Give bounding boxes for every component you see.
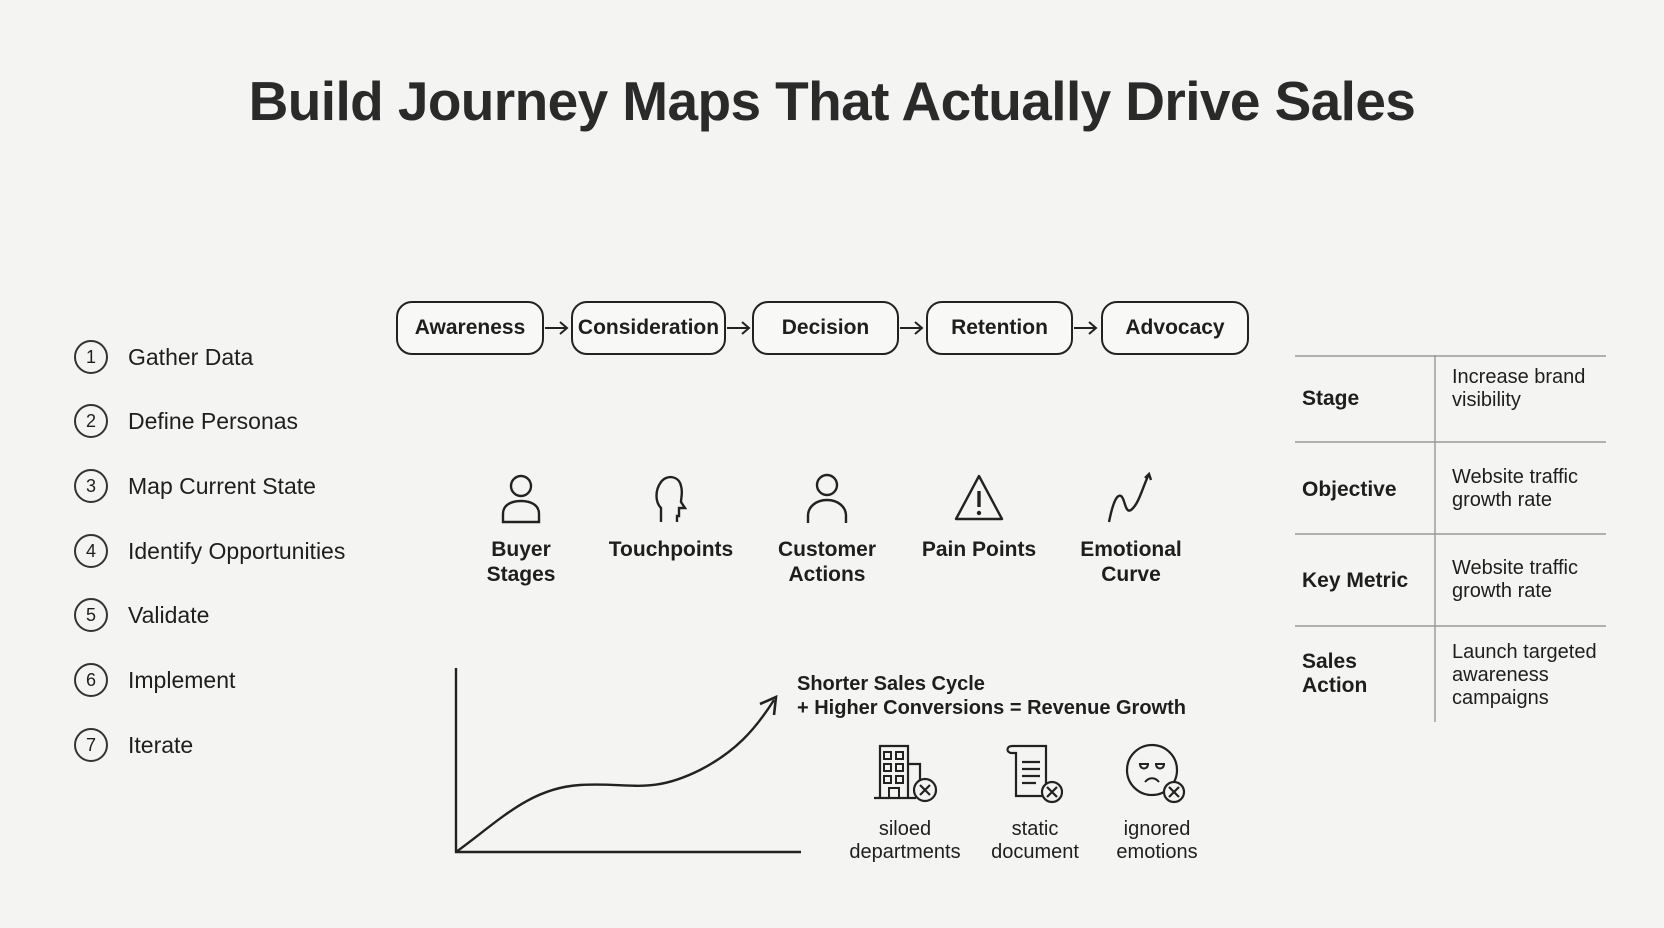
step 4 [74,534,345,568]
icon: buyer stages: Stages [487,563,555,586]
icon: touchpoints: Touchpoints [609,538,733,561]
step 2 [74,404,298,438]
step 3: 3 [86,476,96,496]
step 3: Map Current State [128,472,316,498]
stage: Awareness [396,301,544,355]
icon: emotional curve: Emotional [1080,538,1182,561]
table value: objective [1452,466,1578,511]
stage: Advocacy [1101,301,1249,355]
table label: Sales Action: Sales [1302,650,1357,673]
icon: buyer stages [487,474,555,586]
icon: pain points: Pain Points [922,538,1036,561]
table value: sales action [1452,641,1597,709]
step 2: Define Personas [128,408,298,434]
step 2: 2 [86,410,96,430]
step 6 [74,663,236,697]
icon: emotional curve [1080,472,1182,586]
icon: customer actions: Actions [788,563,866,586]
table label: Key Metric: Key Metric [1302,569,1408,592]
icon: siloed departments [849,744,961,863]
panel: stage table [1295,355,1606,722]
table value: key metric: Website traffic [1452,557,1578,579]
table value: stage [1452,366,1585,411]
table value: key metric [1452,557,1578,602]
stage: Retention [926,301,1073,355]
step 1: 1 [86,346,96,366]
step 5 [74,598,209,632]
table label: Objective: Objective [1302,478,1397,501]
icon: static document: document [991,841,1079,863]
panel: pitfalls [849,744,1198,863]
step 1: Gather Data [128,344,253,370]
table value: stage: Increase brand [1452,366,1585,388]
icon: siloed departments: departments [849,841,961,863]
icon: pain points [922,474,1036,561]
icon: siloed departments: siloed [879,818,931,840]
step 7 [74,728,193,762]
step 3 [74,469,316,503]
icon: customer actions: Customer [778,538,876,561]
table value: sales action: campaigns [1452,687,1549,709]
panel: journey stages flow [396,301,1249,355]
step 5: Validate [128,602,209,628]
icon: touchpoints [609,476,733,561]
callout: revenue formula: + Higher Conversions = Revenue Growth [797,697,1186,719]
table value: sales action: Launch targeted [1452,641,1597,663]
stage: Advocacy: Advocacy [1125,316,1225,339]
stage: Decision [752,301,899,355]
step 7: 7 [86,734,96,754]
icon: buyer stages: Buyer [491,538,551,561]
arrow [545,321,568,335]
table value: objective: growth rate [1452,489,1552,511]
stage: Retention: Retention [951,316,1048,339]
step 5: 5 [86,604,96,624]
icon: static document [991,744,1079,863]
step 4: Identify Opportunities [128,538,345,564]
arrow [900,321,924,335]
stage: Awareness: Awareness [415,316,525,339]
panel: steps list [74,340,345,762]
table value: sales action: awareness [1452,664,1549,686]
step 1 [74,340,254,374]
icon: emotional curve: Curve [1101,563,1161,586]
arrow [727,321,750,335]
icon: customer actions [778,474,876,586]
title: Build Journey Maps That Actually Drive Sales [249,70,1415,132]
callout: revenue formula [797,673,1186,719]
table label: Sales Action: Action [1302,674,1367,697]
table value: stage: visibility [1452,389,1521,411]
step 7: Iterate [128,732,193,758]
stage: Decision: Decision [782,316,869,339]
stage: Consideration: Consideration [578,316,719,339]
icon: ignored emotions: emotions [1116,841,1198,863]
step 6: Implement [128,666,235,692]
icon: static document: static [1012,818,1058,840]
callout: revenue formula: Shorter Sales Cycle [797,673,985,695]
step 6: 6 [86,670,96,690]
step 4: 4 [86,540,96,560]
table value: key metric: growth rate [1452,580,1552,602]
table value: objective: Website traffic [1452,466,1578,488]
stage: Consideration [571,301,726,355]
arrow [1074,321,1098,335]
icon: ignored emotions [1116,744,1198,863]
icon: ignored emotions: ignored [1124,818,1190,840]
table label: Sales Action [1302,650,1367,697]
panel: map components [487,472,1182,586]
chart: revenue growth curve [454,668,801,854]
table label: Stage: Stage [1302,387,1359,410]
